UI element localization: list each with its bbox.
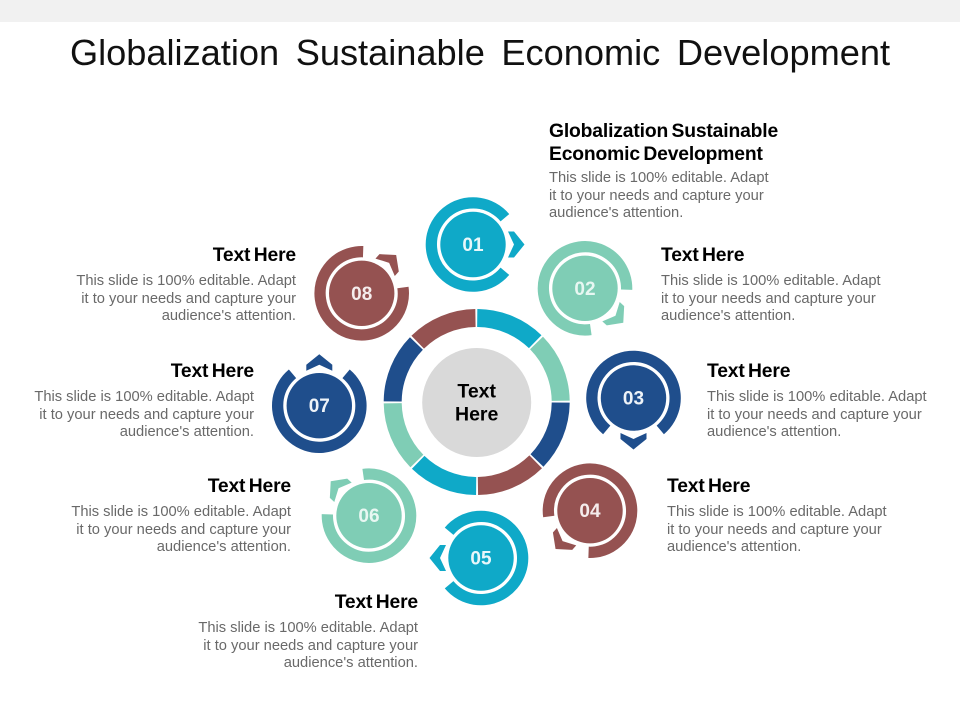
text block: 03: it to your needs and capture your [707,407,922,423]
center circle: Text [457,380,497,402]
step 06: 06 [358,506,380,527]
text block: 07: This slide is 100% editable. Adapt [34,389,254,405]
step 08 [279,210,445,376]
center circle: Here [455,404,499,426]
step 05: 05 [470,548,492,570]
step 05 [422,499,540,617]
text block: 05: audience's attention. [284,655,418,671]
step 04: 04 [579,501,601,522]
text block: 02: Text Here [661,245,744,266]
text block: 02: This slide is 100% editable. Adapt [661,273,881,289]
text block: 08: it to your needs and capture your [81,291,296,307]
step 04 [507,428,673,594]
title: Globalization Sustainable Economic Development [70,32,890,73]
step 07: 07 [309,396,330,417]
central ring [358,283,595,521]
text block: main heading: Economic Development [549,144,763,165]
step 01: 01 [462,235,484,256]
text block: 02: it to your needs and capture your [661,291,876,307]
text block: main heading: Globalization Sustainable [549,121,778,142]
text block: main heading [549,121,778,221]
text block: 02: audience's attention. [661,308,795,324]
text block: 08: Text Here [213,245,296,266]
text block: 07: audience's attention. [120,424,254,440]
text block: 07: it to your needs and capture your [39,407,254,423]
text block: 08 [76,245,296,324]
text block: 05 [198,592,418,671]
step 08: 08 [351,284,372,305]
text block: 04: it to your needs and capture your [667,522,882,538]
step 06 [286,433,452,599]
top bar [0,0,960,22]
text block: 06: This slide is 100% editable. Adapt [71,504,291,520]
text block: 06: audience's attention. [157,539,291,555]
text block: 06: it to your needs and capture your [76,522,291,538]
text block: main heading: it to your needs and capture your [549,188,764,204]
text block: main heading: This slide is 100% editable. Adapt [549,170,769,186]
text block: 04: audience's attention. [667,539,801,555]
text block: 04 [667,476,887,555]
text block: 04: This slide is 100% editable. Adapt [667,504,887,520]
text block: 03 [707,361,927,440]
text block: 07 [34,361,254,440]
text block: 03: Text Here [707,361,790,382]
step 02: 02 [574,279,596,300]
text block: 03: audience's attention. [707,424,841,440]
text block: 02 [661,245,881,324]
text block: 06 [71,476,291,555]
text block: 03: This slide is 100% editable. Adapt [707,389,927,405]
text block: 05: it to your needs and capture your [203,638,418,654]
text block: 08: audience's attention. [162,308,296,324]
text block: main heading: audience's attention. [549,205,683,221]
text block: 05: Text Here [335,592,418,613]
step 03: 03 [623,388,644,410]
step 03 [575,339,692,457]
text block: 06: Text Here [208,476,291,497]
center circle [422,348,531,457]
step 07 [261,347,378,464]
step 01 [414,186,532,303]
text block: 05: This slide is 100% editable. Adapt [198,620,418,636]
step 02 [502,205,668,371]
text block: 08: This slide is 100% editable. Adapt [76,273,296,289]
text block: 04: Text Here [667,476,750,497]
text block: 07: Text Here [171,361,254,382]
